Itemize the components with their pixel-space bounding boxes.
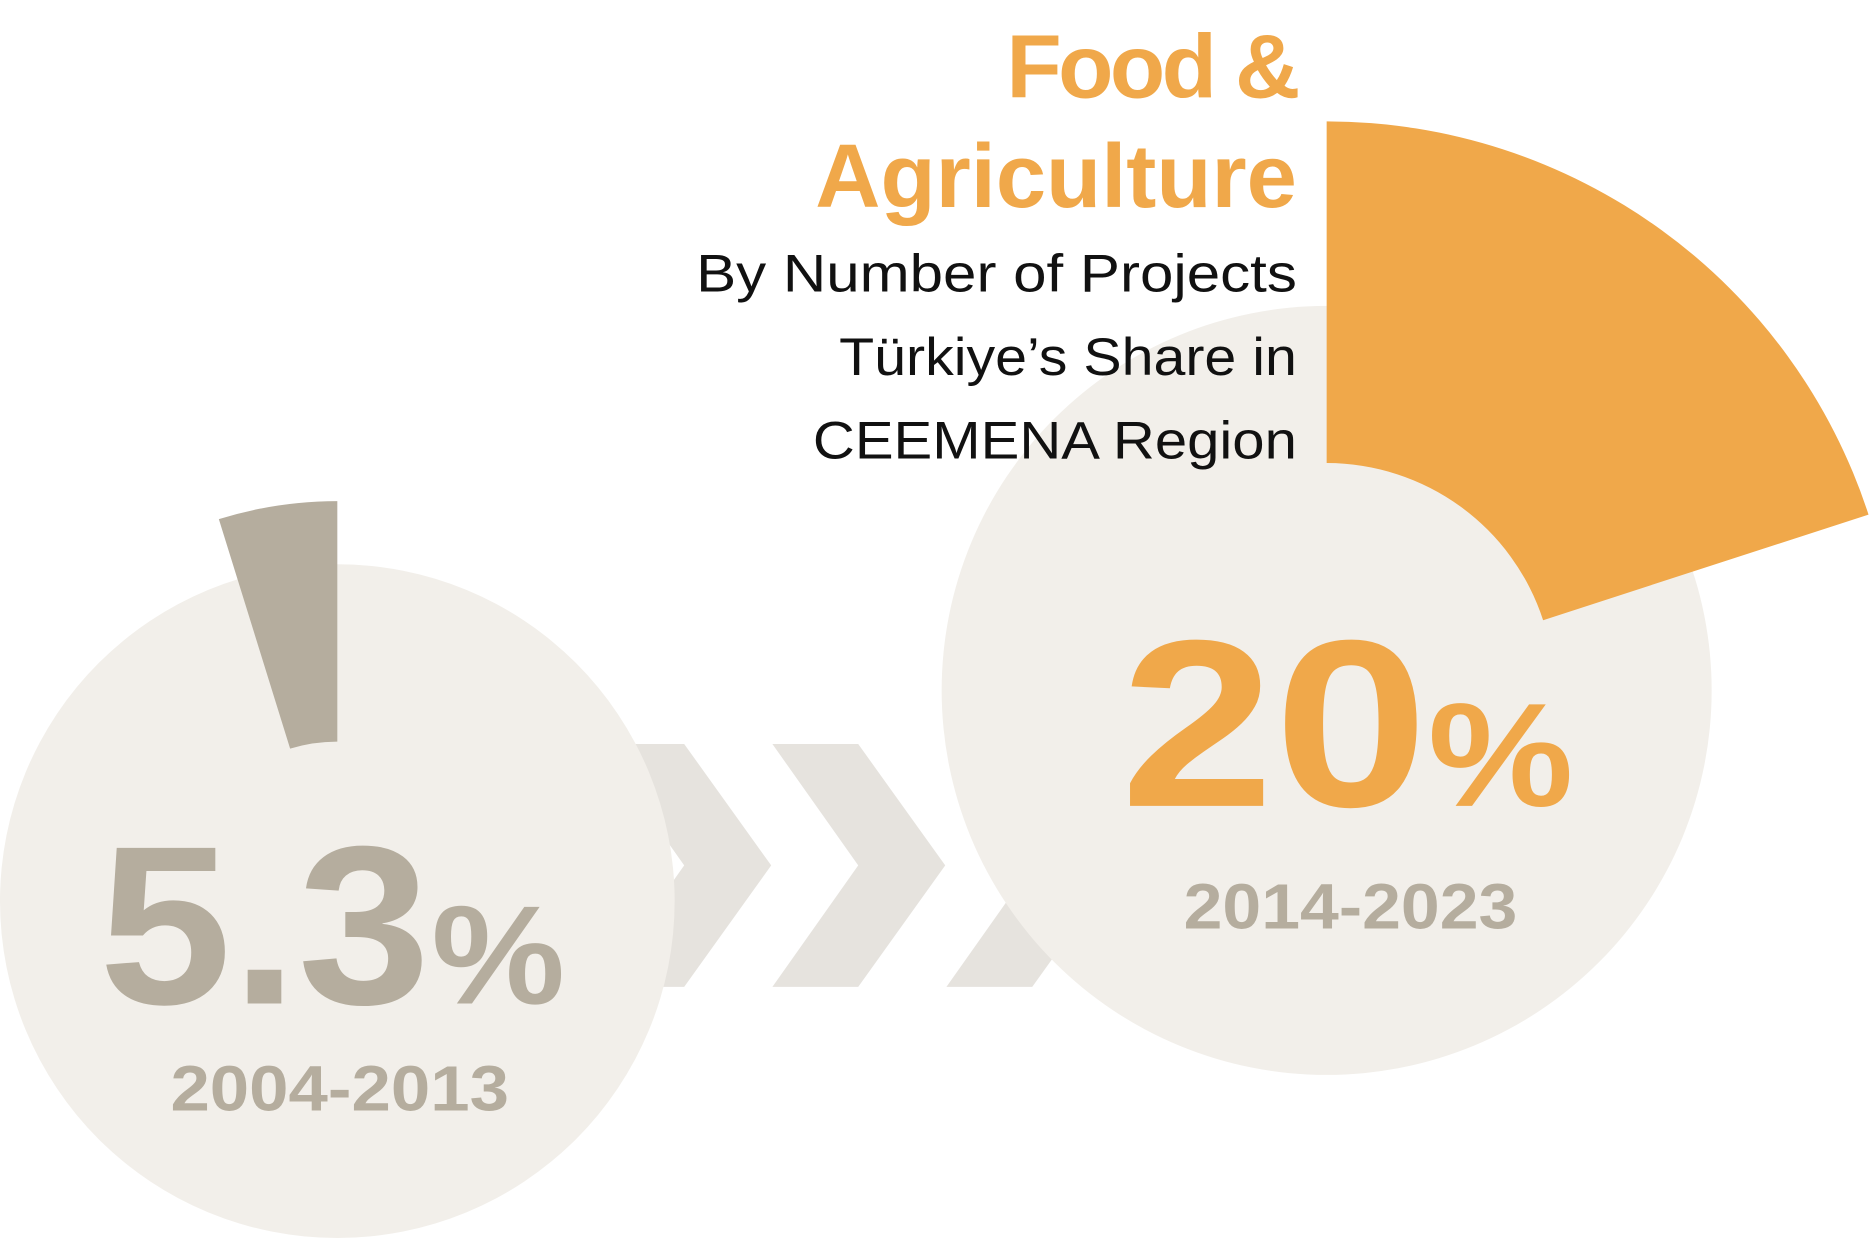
subtitle	[696, 246, 1297, 470]
subtitle: Türkiye’s Share in	[839, 329, 1297, 387]
title: Food &	[1006, 17, 1298, 118]
wedge 5.3%	[219, 501, 337, 749]
right circle: 2014-2023	[942, 121, 1869, 1075]
subtitle: CEEMENA Region	[813, 412, 1297, 470]
period label: 2004-2013	[170, 1053, 509, 1125]
period label: 2014-2023	[1184, 871, 1517, 942]
left circle: 2004-2013: %	[431, 877, 565, 1033]
left circle: 2004-2013	[0, 501, 675, 1238]
chevron arrows	[598, 744, 1119, 987]
value 5.3%: 5.3	[99, 799, 430, 1051]
title: Agriculture	[815, 126, 1297, 227]
wedge 20%	[1327, 121, 1869, 620]
subtitle: By Number of Projects	[696, 246, 1297, 304]
right circle: 2014-2023: %	[1428, 673, 1573, 838]
title	[815, 17, 1298, 227]
value 20%: 20	[1120, 591, 1428, 857]
